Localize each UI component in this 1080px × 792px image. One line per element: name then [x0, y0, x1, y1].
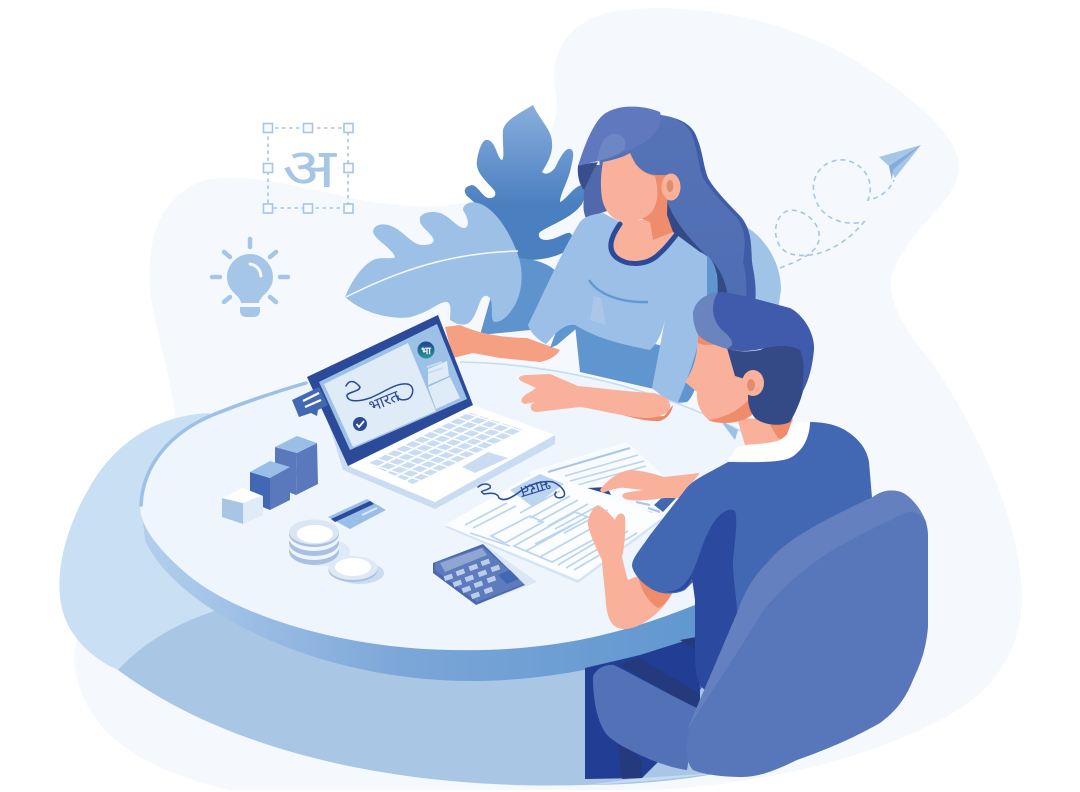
- laptop: screen bezel: [307, 315, 473, 466]
- man: collar backing: [720, 420, 738, 440]
- woman: near arm and pointing hand: [519, 374, 673, 421]
- plant: pale leaf: [345, 202, 522, 325]
- plant: upper leaf: [465, 105, 586, 260]
- man: top hair: [693, 292, 814, 393]
- chair seat: [593, 665, 697, 770]
- man: face: [685, 333, 755, 423]
- man: ear: [742, 370, 764, 396]
- man: neck shadow: [770, 418, 793, 440]
- laptop: logo: [418, 342, 434, 358]
- man: hair underside shadow: [698, 333, 735, 350]
- icon: selection box with letter: [264, 124, 353, 213]
- woman: torso: [528, 213, 718, 405]
- icon: light bulb: [212, 239, 288, 317]
- table: rim highlight: [141, 383, 306, 505]
- front paper: calligraphy signature: भारत: [517, 475, 553, 500]
- laptop: screen main panel: [324, 343, 436, 447]
- front paper: [445, 470, 663, 583]
- floor shadow: [118, 600, 880, 786]
- laptop: sidebar panel top: [428, 361, 449, 385]
- table: side: [141, 505, 720, 681]
- woman: far arm: [445, 325, 560, 362]
- laptop: sidebar lines: [427, 362, 443, 373]
- laptop: base: [348, 405, 555, 502]
- laptop: calligraphy signature: [346, 381, 413, 416]
- table shadow on floor: [59, 413, 220, 670]
- woman: neck: [609, 218, 677, 265]
- man: jaw shadow: [708, 398, 752, 423]
- front paper: highlighted stamp: [510, 474, 564, 507]
- front paper: text lines: [465, 491, 637, 570]
- laptop: screen sidebar: [319, 324, 467, 450]
- plant: dark rear leaf: [480, 258, 557, 335]
- man: shirt: [632, 422, 873, 690]
- laptop: sidebar panel bottom: [428, 377, 460, 409]
- laptop: trackpad: [462, 452, 508, 473]
- woman: neck shadow: [630, 153, 673, 240]
- calculator: [433, 544, 537, 605]
- coins: [289, 520, 384, 584]
- stacked blocks: [222, 436, 318, 524]
- man: collar: [728, 422, 810, 461]
- laptop: keyboard: [367, 412, 523, 484]
- woman: ear: [662, 174, 680, 200]
- man: hand and forearm: [588, 505, 672, 629]
- man: neck: [737, 418, 793, 445]
- icon: dashed flight path: [776, 160, 894, 268]
- woman: face: [601, 153, 657, 222]
- chair back: [687, 490, 928, 777]
- floor shadow highlight: [585, 723, 880, 785]
- front paper: calligraphy signature: [478, 475, 565, 500]
- laptop: calligraphy signature: भारत: [367, 388, 403, 416]
- man: hand on paper: [600, 470, 700, 501]
- back paper: [528, 442, 680, 540]
- icon: selection box with letter: अ: [282, 138, 337, 199]
- man: legs: [585, 636, 700, 779]
- laptop: hinge shadow: [319, 385, 350, 470]
- laptop: logo: भा: [421, 346, 431, 357]
- woman: hair: [578, 107, 756, 315]
- laptop: chat tag: [292, 387, 328, 417]
- table: far rim: [460, 362, 745, 433]
- laptop: check badge: [353, 417, 367, 431]
- woman: back hair shape and pale backdrop: [735, 226, 781, 310]
- laptop: base thickness: [343, 435, 555, 509]
- icon: paper plane: [879, 145, 921, 180]
- credit card: [328, 499, 386, 529]
- man: dark hair: [727, 345, 806, 425]
- table: top: [140, 362, 760, 650]
- laptop: [292, 315, 555, 509]
